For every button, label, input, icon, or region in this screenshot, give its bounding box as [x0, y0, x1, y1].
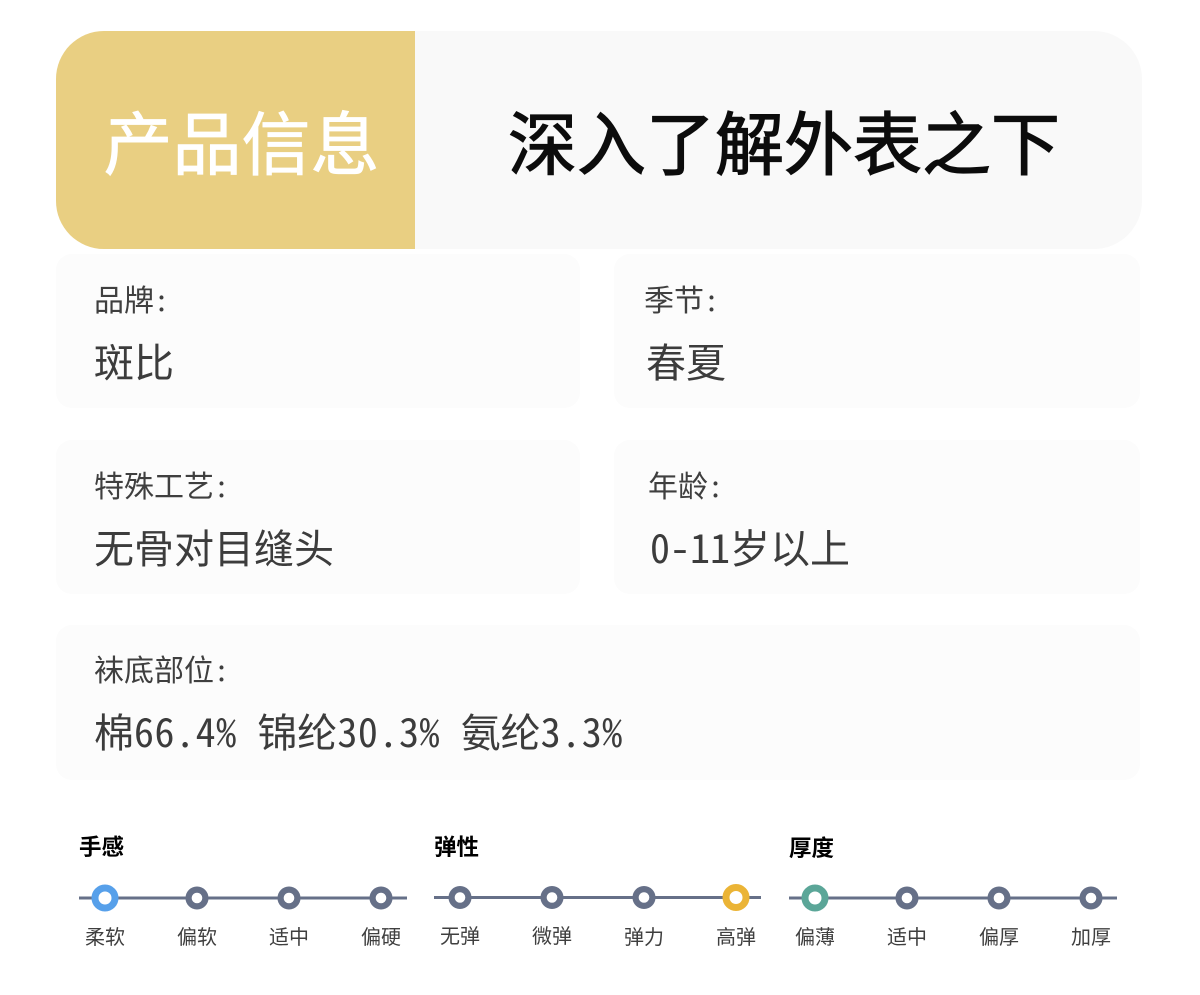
marker: fairly thick [991, 890, 1007, 906]
tick labels: 适中 [269, 926, 309, 949]
brand value: 斑比 [94, 331, 174, 389]
marker: soft (selected) [95, 888, 115, 908]
panel: brand [56, 254, 580, 408]
panel: age [614, 440, 1140, 594]
marker: medium [281, 890, 297, 906]
heading tab: product info [56, 31, 415, 249]
panel: sole material [56, 625, 1140, 780]
season value: 春夏 [646, 331, 726, 389]
marker: extra thick [1083, 890, 1099, 906]
title: hand feel: 手感 [79, 834, 124, 860]
marker: thin (selected) [805, 888, 825, 908]
title: thickness: 厚度 [789, 836, 834, 861]
heading tab: product info: 产品信息 [104, 107, 380, 184]
tick labels: 柔软 [85, 926, 125, 949]
tick labels: 偏硬 [361, 926, 401, 949]
tick labels [85, 926, 401, 949]
tick labels [440, 925, 756, 949]
marker: high stretch (selected) [726, 888, 746, 908]
age value: 0-11岁以上 [650, 517, 850, 575]
marker: fairly soft [189, 890, 205, 906]
marker: slight stretch [544, 889, 560, 906]
tick labels: 无弹 [440, 925, 480, 948]
craft label: 特殊工艺: [94, 462, 229, 506]
material value: 棉66.4% 锦纶30.3% 氨纶3.3% [94, 701, 623, 759]
material label: 袜底部位: [94, 646, 229, 690]
tick labels: 偏软 [177, 926, 217, 949]
heading: subtitle: 深入了解外表之下 [508, 107, 1060, 184]
title: elasticity: 弹性 [434, 835, 479, 860]
marker: stretchy [636, 889, 652, 906]
tick labels: 加厚 [1071, 926, 1111, 949]
tick labels: 微弹 [532, 925, 572, 948]
panel: special craft [56, 440, 580, 594]
scale charts [79, 834, 1117, 949]
header banner [56, 31, 1142, 249]
tick labels: 偏薄 [795, 926, 835, 949]
scale: hand feel [79, 834, 407, 949]
tick labels: 弹力 [624, 926, 664, 949]
craft value: 无骨对目缝头 [94, 517, 334, 575]
season label: 季节: [644, 276, 719, 320]
age label: 年龄: [648, 462, 723, 506]
marker: fairly firm [373, 890, 389, 906]
marker: no stretch [452, 889, 468, 906]
tick labels: 高弹 [716, 926, 756, 949]
tick labels: 偏厚 [979, 926, 1019, 949]
brand label: 品牌: [94, 276, 169, 320]
scale: elasticity [434, 835, 761, 949]
panel: season [614, 254, 1140, 408]
tick labels: 适中 [887, 926, 927, 949]
tick labels [795, 926, 1111, 949]
scale: thickness [789, 836, 1117, 949]
marker: medium [899, 890, 915, 906]
